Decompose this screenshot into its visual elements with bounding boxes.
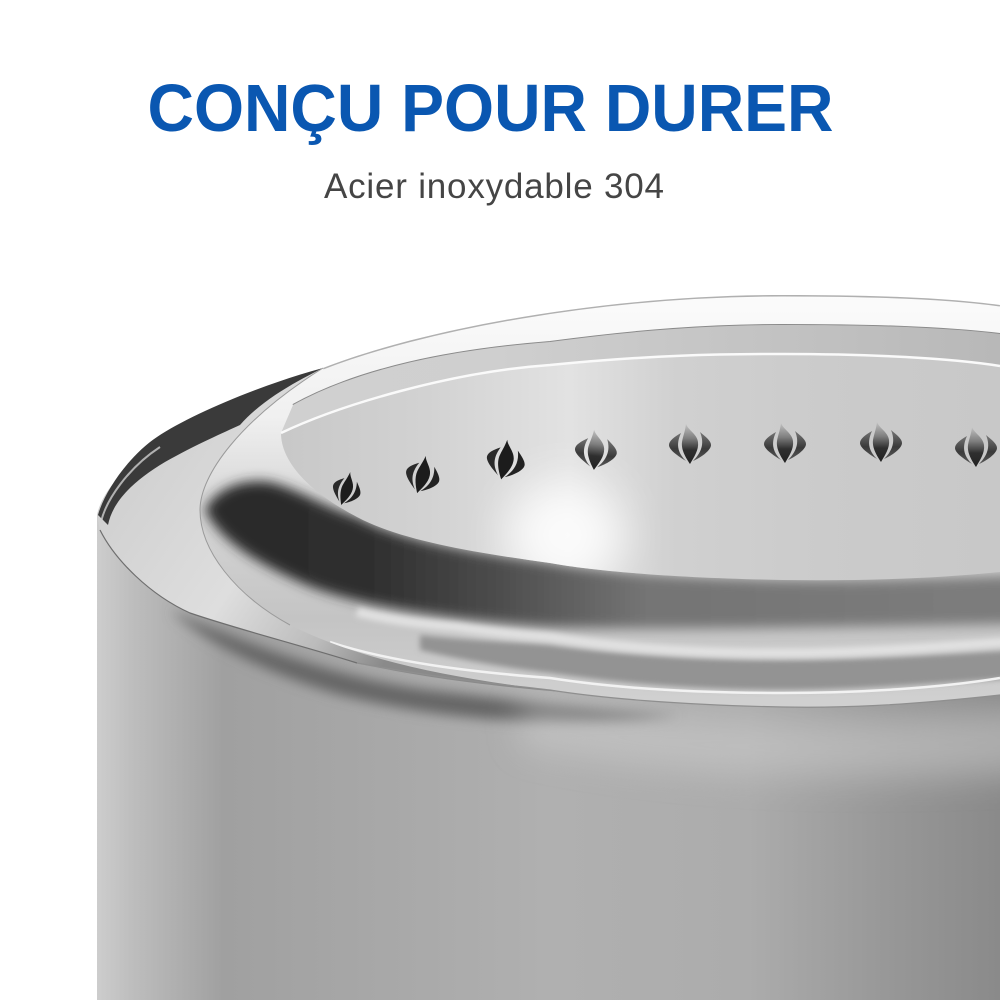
top lid lip	[323, 295, 1000, 368]
lid outline	[200, 368, 323, 625]
outer rim flat surface	[97, 368, 700, 700]
bright edge ring	[330, 642, 1000, 693]
flame vents	[328, 422, 997, 510]
opening floor	[281, 356, 1000, 580]
flame vent 4	[573, 428, 619, 472]
dark band below opening	[205, 481, 1000, 628]
can body	[97, 486, 1000, 1000]
flame vent 2	[401, 452, 445, 498]
inner rim highlight	[281, 354, 1000, 433]
rim dark crescent	[98, 368, 323, 525]
flame vent 6	[764, 423, 806, 463]
flame vent 3	[482, 436, 530, 484]
lower highlight ring	[357, 612, 1000, 653]
flame vent 7	[860, 422, 902, 462]
bottom edge line	[357, 663, 1000, 707]
rim bright lip	[101, 447, 160, 522]
flame vent 8	[955, 427, 997, 467]
subtitle: Acier inoxydable 304	[324, 167, 664, 206]
lower recessed ring	[420, 635, 1000, 690]
opening back wall	[281, 325, 1000, 433]
product: stainless steel fire pit	[97, 290, 1000, 1000]
lid insert	[190, 290, 1000, 710]
rim lower edge	[100, 530, 357, 663]
title: CONÇU POUR DURER	[148, 71, 834, 146]
upper rim line	[293, 325, 1000, 405]
flame vent 1	[328, 468, 366, 510]
flame vent 5	[669, 424, 711, 464]
